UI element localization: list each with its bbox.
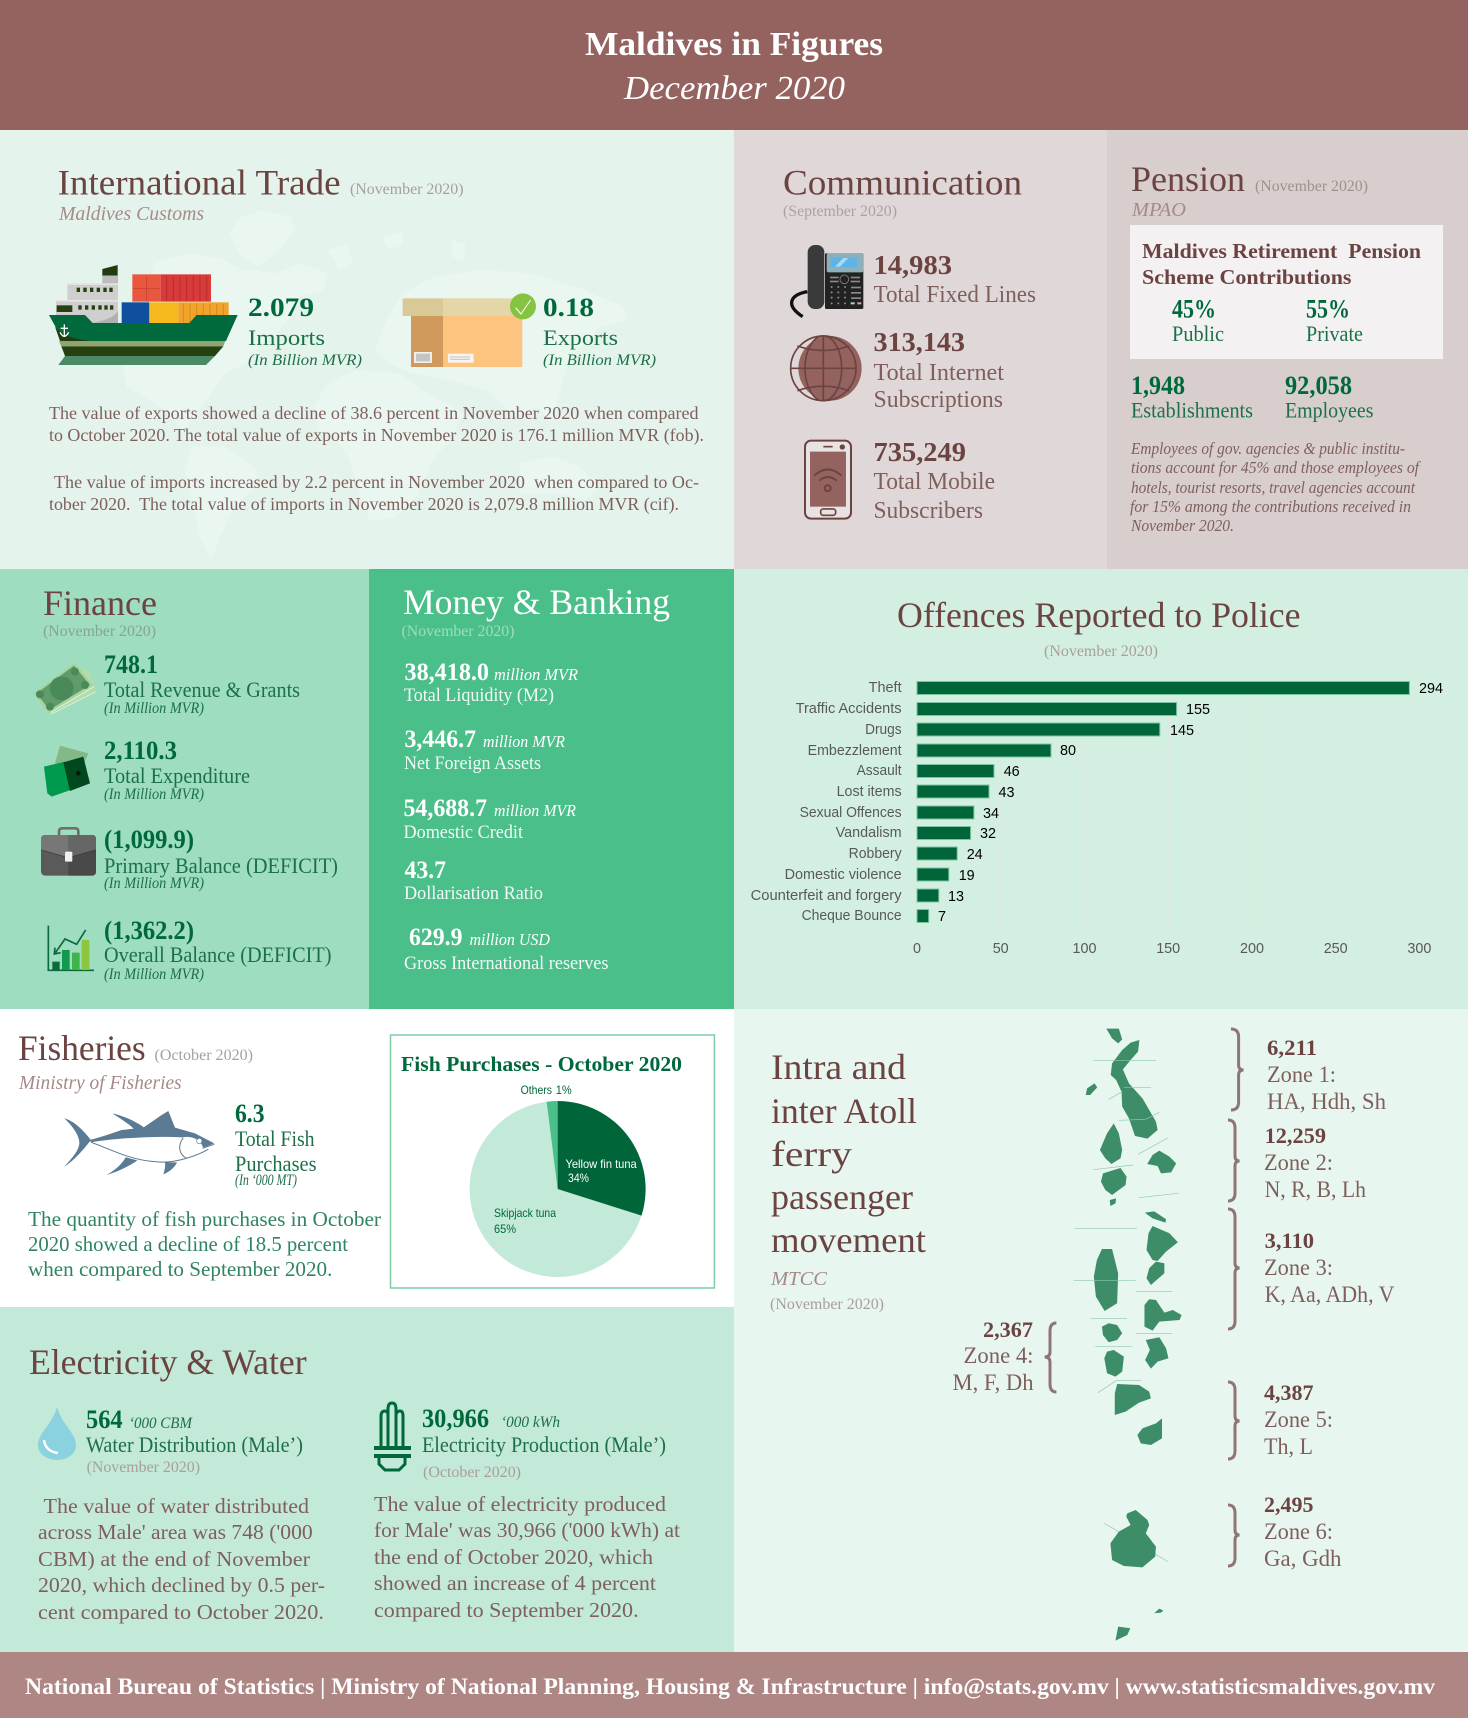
- bracket: zone 4: [1045, 1323, 1056, 1392]
- header banner: [0, 0, 1468, 130]
- zone 5 text: [1264, 1380, 1333, 1459]
- icon: desk phone: [792, 245, 863, 317]
- establishments stat: [1131, 371, 1253, 422]
- source: Maldives Customs: [58, 203, 204, 225]
- zone 4 text: [952, 1317, 1034, 1395]
- total internet subscriptions figure: 313,143: [874, 327, 965, 357]
- text block: imports commentary: [49, 472, 699, 515]
- pie slice: others: [547, 1101, 558, 1189]
- label: skipjack tuna: 65%: [494, 1222, 516, 1236]
- total liquidity: [404, 659, 579, 706]
- text block: electricity commentary: for Male' was 30,966 ('000 kWh) at: [374, 1518, 680, 1542]
- footer banner: [0, 1652, 1468, 1718]
- pie chart: fish purchases: [390, 1035, 714, 1288]
- employees stat: [1285, 371, 1374, 422]
- label: yellow fin tuna: Yellow fin tuna: [566, 1157, 637, 1171]
- panel: communication: [734, 130, 1107, 569]
- net foreign assets: Net Foreign Assets: [404, 753, 541, 774]
- total fixed lines figure: 14,983: [874, 250, 952, 280]
- bar chart: offences: 13: [948, 888, 964, 905]
- total fish purchases unit: (In ‘000 MT): [235, 1172, 297, 1189]
- bar chart: offences: Vandalism: [836, 824, 902, 841]
- panel: fisheries: [0, 1009, 734, 1307]
- world map background: [122, 210, 627, 560]
- exports label: Exports: [543, 325, 618, 350]
- icon: wallet: [44, 746, 90, 797]
- date: (November 2020): [350, 181, 464, 198]
- private share: 55%: [1306, 294, 1350, 324]
- icon: globe: [791, 336, 862, 401]
- gross international reserves: 629.9: [409, 924, 462, 951]
- public share: Public: [1172, 321, 1224, 346]
- gross international reserves: Gross International reserves: [404, 953, 608, 974]
- bar chart: offences: 32: [980, 825, 996, 842]
- water distribution figure: [86, 1405, 194, 1434]
- text block: water commentary: 2020, which declined by 0.5 per-: [38, 1573, 325, 1597]
- source: MTCC: [770, 1268, 828, 1290]
- domestic credit: [404, 795, 577, 843]
- heading: ferry passenger movement: passenger: [771, 1177, 913, 1217]
- heading: ferry passenger movement: Intra and: [771, 1047, 906, 1087]
- zone 1 text: [1267, 1035, 1386, 1114]
- bar chart: offences: [751, 677, 1443, 957]
- bar chart: offences: Theft: [869, 679, 902, 696]
- source: MPAO: [1131, 199, 1186, 221]
- electricity production figure: 30,966: [422, 1404, 489, 1433]
- gross international reserves: million USD: [470, 930, 551, 949]
- water distribution figure: 564: [86, 1405, 123, 1434]
- overall balance unit: (In Million MVR): [104, 966, 204, 983]
- zone 6 text: 2,495: [1264, 1492, 1314, 1517]
- zone 1 text: Zone 1:: [1267, 1062, 1336, 1087]
- panel: electricity and water: [0, 1307, 734, 1652]
- title: Maldives in Figures: [585, 26, 883, 63]
- icon: cargo ship: [49, 265, 238, 365]
- bar chart: offences: 300: [1407, 940, 1431, 957]
- total revenue figure: 748.1: [104, 650, 158, 679]
- zone 2 text: Zone 2:: [1264, 1150, 1333, 1175]
- icon: bar chart with trend: [48, 926, 94, 970]
- private share: [1306, 294, 1363, 346]
- text block: water commentary: The value of water distributed: [44, 1494, 310, 1518]
- map: maldives atolls, north: [1074, 1029, 1182, 1377]
- bracket: zone 2: [1228, 1120, 1240, 1201]
- total fish purchases label: Purchases: [235, 1151, 316, 1176]
- bar chart: offences: 100: [1072, 940, 1096, 957]
- card heading: [1142, 239, 1421, 289]
- domestic credit: Domestic Credit: [404, 822, 524, 843]
- heading: ferry passenger movement: movement: [771, 1220, 926, 1260]
- total internet subscriptions label: Subscriptions: [874, 387, 1003, 413]
- text block: electricity commentary: The value of electricity produced: [374, 1492, 667, 1516]
- establishments stat: 1,948: [1131, 371, 1185, 400]
- date: (November 2020): [1044, 643, 1158, 660]
- text block: pension note: hotels, tourist resorts, travel agencies account: [1131, 478, 1415, 497]
- total internet subscriptions label: [874, 360, 1004, 413]
- water distribution figure: ‘000 CBM: [129, 1415, 194, 1432]
- card heading: Maldives Retirement Pension: [1142, 239, 1421, 263]
- employees stat: Employees: [1285, 398, 1374, 422]
- electricity production label: Electricity Production (Male’): [422, 1432, 666, 1457]
- text block: fisheries commentary: [28, 1207, 381, 1281]
- total fixed lines label: Total Fixed Lines: [874, 282, 1036, 308]
- text block: fisheries commentary: 2020 showed a decline of 18.5 percent: [28, 1232, 348, 1256]
- bar chart: offences: Cheque Bounce: [802, 907, 902, 924]
- bracket: zone 3: [1228, 1209, 1240, 1329]
- primary balance figure: (1,099.9): [104, 825, 194, 854]
- date: (October 2020): [154, 1047, 253, 1064]
- public share: [1172, 294, 1224, 346]
- electricity production figure: ‘000 kWh: [501, 1414, 560, 1431]
- text block: pension note: November 2020.: [1130, 516, 1234, 535]
- imports label: Imports: [248, 325, 325, 350]
- zone 5 text: 4,387: [1264, 1380, 1314, 1405]
- text block: fisheries commentary: when compared to September 2020.: [28, 1257, 332, 1281]
- bar chart: offences: 200: [1240, 940, 1264, 957]
- dollarisation ratio: Dollarisation Ratio: [404, 883, 543, 904]
- text block: electricity commentary: compared to September 2020.: [374, 1598, 639, 1622]
- bracket: zone 6: [1228, 1505, 1240, 1566]
- text block: water commentary: [38, 1494, 325, 1624]
- bar chart: offences: Drugs: [865, 721, 902, 738]
- panel: money and banking: [369, 569, 734, 1009]
- date: (September 2020): [783, 203, 897, 220]
- text block: exports commentary: [49, 403, 704, 446]
- zone 6 text: Zone 6:: [1264, 1519, 1333, 1544]
- text block: fisheries commentary: The quantity of fish purchases in October: [28, 1207, 381, 1231]
- electricity production figure: [422, 1404, 560, 1433]
- total liquidity: million MVR: [494, 665, 579, 684]
- net foreign assets: [404, 726, 566, 774]
- private share: Private: [1306, 321, 1363, 346]
- primary balance label: Primary Balance (DEFICIT): [104, 853, 338, 878]
- water distribution date: (November 2020): [87, 1459, 200, 1476]
- heading: international trade: International Trade: [58, 162, 341, 202]
- zone 4 text: M, F, Dh: [952, 1370, 1034, 1395]
- total expenditure label: Total Expenditure: [104, 763, 250, 788]
- zone 3 text: 3,110: [1265, 1228, 1314, 1253]
- bar chart: offences: 19: [959, 867, 975, 884]
- total liquidity: 38,418.0: [404, 659, 489, 686]
- electricity production date: (October 2020): [423, 1464, 521, 1481]
- employees stat: 92,058: [1285, 371, 1352, 400]
- bar chart: offences: Domestic violence: [785, 866, 902, 883]
- text block: water commentary: cent compared to October 2020.: [38, 1600, 324, 1624]
- label: others: 1%: [556, 1083, 572, 1097]
- zone 1 text: 6,211: [1267, 1035, 1317, 1060]
- heading: finance: Finance: [43, 583, 157, 623]
- domestic credit: million MVR: [494, 801, 577, 820]
- text block: exports commentary: The value of exports showed a decline of 38.6 percent in November 2020 when compared: [49, 403, 698, 423]
- heading: ferry passenger movement: inter Atoll: [771, 1091, 917, 1131]
- text block: electricity commentary: [374, 1492, 680, 1622]
- total mobile subscribers label: Total Mobile: [874, 469, 995, 495]
- bar chart: offences: 80: [1060, 742, 1076, 759]
- bar chart: offences: 150: [1156, 940, 1180, 957]
- overall balance figure: (1,362.2): [104, 916, 194, 945]
- bar chart: offences: 155: [1186, 701, 1210, 718]
- icon: tuna fish: [64, 1111, 214, 1175]
- total fish purchases label: [235, 1126, 316, 1176]
- icon: energy saving bulb: [374, 1403, 411, 1470]
- heading: ferry passenger movement: ferry: [771, 1134, 852, 1174]
- label: yellow fin tuna: 34%: [568, 1171, 589, 1185]
- text block: water commentary: across Male' area was 748 ('000: [38, 1520, 313, 1544]
- heading: ferry passenger movement: [771, 1047, 926, 1260]
- panel: international trade: [0, 130, 734, 569]
- label: skipjack tuna: [494, 1206, 556, 1236]
- total liquidity: Total Liquidity (M2): [404, 685, 554, 706]
- text block: pension note: tions account for 45% and those employees of: [1131, 458, 1421, 477]
- source: Ministry of Fisheries: [18, 1072, 182, 1094]
- text block: imports commentary: The value of imports increased by 2.2 percent in November 2020 when compared to Oc-: [54, 472, 699, 492]
- heading: money and banking: Money & Banking: [403, 582, 670, 622]
- exports unit: (In Billion MVR): [543, 352, 656, 369]
- public share: 45%: [1172, 294, 1216, 324]
- bar chart: offences: Lost items: [837, 783, 902, 800]
- total revenue unit: (In Million MVR): [104, 700, 204, 717]
- card heading: Scheme Contributions: [1142, 265, 1352, 289]
- zone 2 text: 12,259: [1265, 1123, 1326, 1148]
- panel: finance: [0, 569, 369, 1009]
- total expenditure figure: 2,110.3: [104, 736, 177, 765]
- bar chart: offences: Counterfeit and forgery: [751, 887, 902, 904]
- bar chart: offences: Robbery: [849, 845, 902, 862]
- date: (November 2020): [402, 623, 514, 640]
- water distribution label: Water Distribution (Male’): [86, 1432, 303, 1457]
- dollarisation ratio: [404, 857, 543, 904]
- overall balance label: Overall Balance (DEFICIT): [104, 942, 332, 967]
- map: maldives atolls, south: [1098, 1381, 1168, 1641]
- exports figure: 0.18: [543, 293, 594, 322]
- panel: pension: [1107, 130, 1468, 569]
- icon: briefcase: [41, 828, 96, 876]
- zone 6 text: [1264, 1492, 1342, 1571]
- zone 6 text: Ga, Gdh: [1264, 1546, 1342, 1571]
- bar chart: offences: Assault: [857, 762, 902, 779]
- icon: banknotes: [33, 662, 96, 714]
- bar chart: offences: 43: [998, 784, 1014, 801]
- total fish purchases label: Total Fish: [235, 1126, 315, 1151]
- zone 1 text: HA, Hdh, Sh: [1267, 1089, 1386, 1114]
- pie slice: skipjack tuna: [470, 1102, 642, 1277]
- icon: water drop: [38, 1407, 76, 1460]
- text block: imports commentary: tober 2020. The total value of imports in November 2020 is 2,079.8 million MVR (cif).: [49, 494, 679, 515]
- zone 3 text: [1264, 1228, 1395, 1307]
- footer text: National Bureau of Statistics | Ministry of National Planning, Housing & Infrastructure | info@stats.gov.mv | www.statisticsmaldives.gov.mv: [25, 1674, 1435, 1700]
- text block: pension note: [1130, 439, 1421, 535]
- heading: fisheries: Fisheries: [18, 1028, 146, 1068]
- heading: pension: Pension: [1131, 159, 1245, 199]
- bar chart: offences: 34: [983, 805, 999, 822]
- net foreign assets: 3,446.7: [404, 726, 476, 753]
- total mobile subscribers label: Subscribers: [874, 498, 983, 524]
- text block: pension note: Employees of gov. agencies & public institu-: [1130, 439, 1405, 458]
- total expenditure unit: (In Million MVR): [104, 786, 204, 803]
- bar chart: offences: Embezzlement: [808, 742, 902, 759]
- total fish purchases figure: 6.3: [235, 1099, 264, 1128]
- text block: pension note: for 15% among the contributions received in: [1130, 497, 1411, 516]
- text block: electricity commentary: showed an increase of 4 percent: [374, 1571, 656, 1595]
- bar chart: offences: 294: [1419, 680, 1443, 697]
- zone 5 text: Zone 5:: [1264, 1407, 1333, 1432]
- panel: ferry passenger movement: [734, 1009, 1468, 1652]
- date: (November 2020): [1255, 178, 1368, 195]
- zone 4 text: 2,367: [983, 1317, 1033, 1342]
- icon: parcel box: [403, 293, 536, 367]
- bar chart: offences: 50: [993, 940, 1009, 957]
- text block: electricity commentary: the end of October 2020, which: [374, 1545, 654, 1569]
- bracket: zone 1: [1231, 1029, 1244, 1110]
- zone 3 text: Zone 3:: [1264, 1255, 1333, 1280]
- bar chart: offences: 145: [1170, 722, 1194, 739]
- total mobile subscribers label: [874, 469, 995, 524]
- subtitle: December 2020: [623, 70, 845, 107]
- bar chart: offences: Traffic Accidents: [796, 700, 902, 717]
- label: yellow fin tuna: [566, 1157, 637, 1185]
- heading: offences: Offences Reported to Police: [897, 595, 1300, 635]
- total mobile subscribers figure: 735,249: [874, 437, 966, 467]
- gross international reserves: [404, 924, 608, 974]
- date: (November 2020): [43, 623, 156, 640]
- panel: offences reported to police: [734, 569, 1468, 1009]
- pie slice: yellow fin tuna: [558, 1101, 646, 1216]
- primary balance unit: (In Million MVR): [104, 875, 204, 892]
- total internet subscriptions label: Total Internet: [874, 360, 1004, 386]
- bar chart: offences: Sexual Offences: [800, 804, 902, 821]
- dollarisation ratio: 43.7: [404, 857, 446, 884]
- total revenue label: Total Revenue & Grants: [104, 677, 300, 702]
- zone 4 text: Zone 4:: [964, 1343, 1034, 1368]
- bar chart: offences: 250: [1324, 940, 1348, 957]
- bar chart: offences: 0: [913, 940, 921, 957]
- bracket: zone 5: [1228, 1382, 1240, 1459]
- zone 5 text: Th, L: [1264, 1434, 1313, 1459]
- bar chart: offences: 7: [938, 908, 946, 925]
- icon: mobile phone: [805, 441, 851, 519]
- text block: water commentary: CBM) at the end of November: [38, 1547, 310, 1571]
- domestic credit: 54,688.7: [404, 795, 487, 822]
- heading: communication: Communication: [783, 162, 1022, 202]
- bar chart: offences: 46: [1004, 763, 1020, 780]
- heading: electricity and water: Electricity & Water: [29, 1342, 307, 1382]
- label: skipjack tuna: Skipjack tuna: [494, 1206, 556, 1220]
- bar chart: offences: 24: [967, 846, 983, 863]
- imports unit: (In Billion MVR): [248, 352, 362, 369]
- zone 2 text: N, R, B, Lh: [1265, 1177, 1366, 1202]
- label: others: Others: [521, 1083, 552, 1097]
- net foreign assets: million MVR: [483, 732, 566, 751]
- chart title: Fish Purchases - October 2020: [401, 1052, 682, 1076]
- imports figure: 2.079: [248, 293, 314, 322]
- zone 3 text: K, Aa, ADh, V: [1265, 1282, 1395, 1307]
- establishments stat: Establishments: [1131, 398, 1253, 422]
- card: retirement pension contributions: [1130, 225, 1443, 359]
- zone 2 text: [1264, 1123, 1366, 1202]
- text block: exports commentary: to October 2020. The total value of exports in November 2020 is 176.1 million MVR (fob).: [49, 425, 704, 446]
- date: (November 2020): [770, 1296, 884, 1313]
